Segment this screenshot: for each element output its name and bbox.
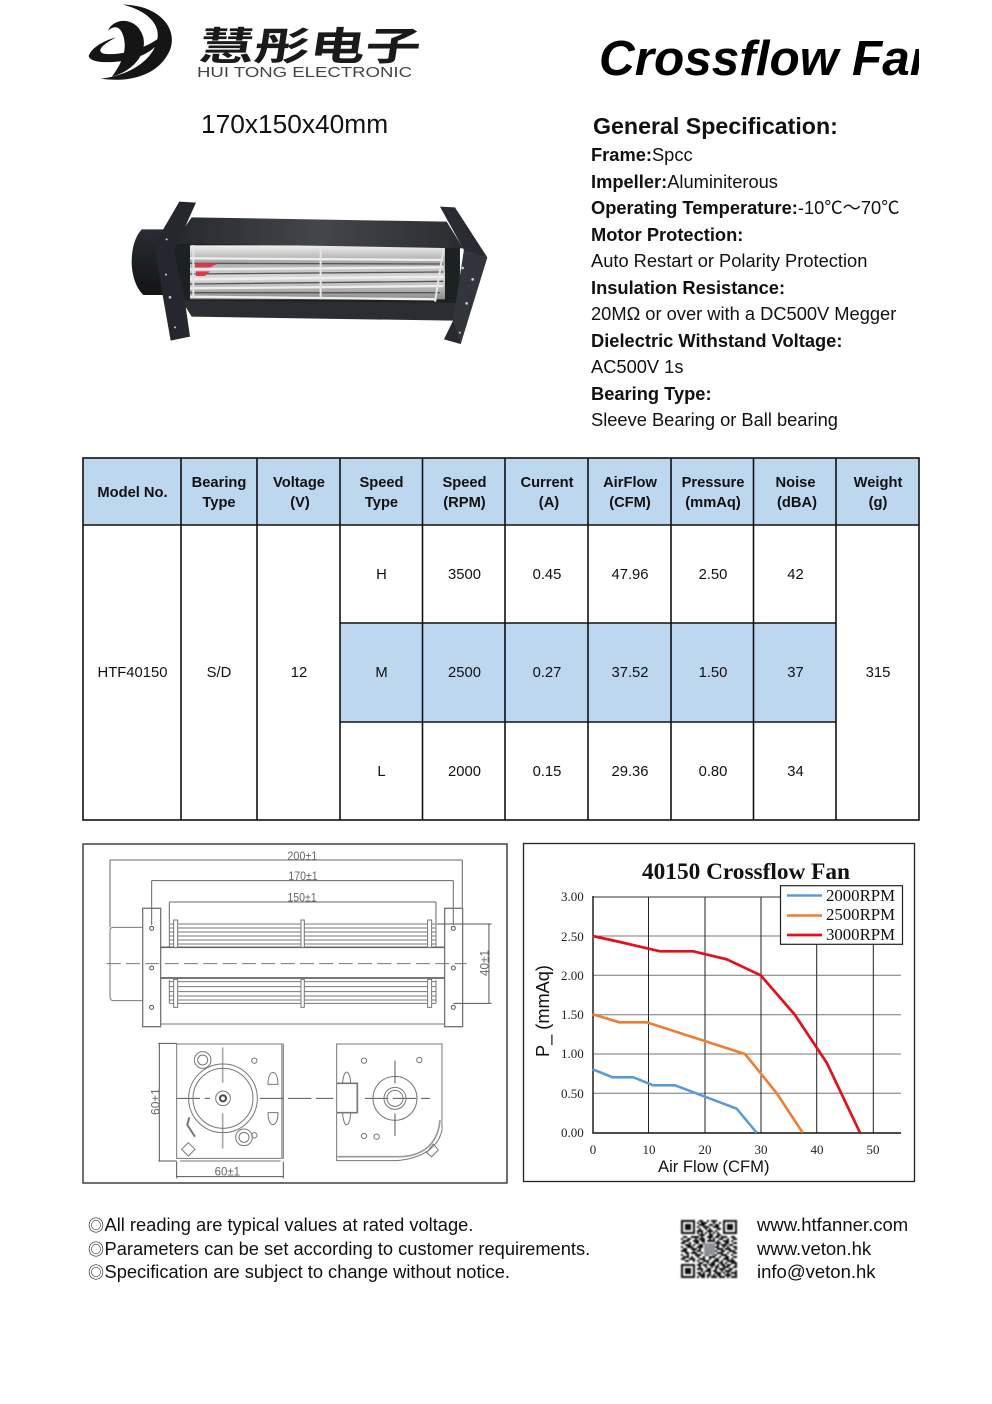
- table header labels: (RPM): [443, 495, 486, 511]
- curve: 3000 rpm: [593, 936, 860, 1133]
- footnotes: ◎: [88, 1217, 104, 1235]
- legend: 2500RPM: [826, 905, 895, 924]
- interior: [173, 243, 460, 305]
- table data cells: 0.15: [533, 764, 561, 780]
- x axis tick labels: 10: [642, 1142, 656, 1157]
- table data cells: [98, 567, 890, 780]
- fan photo: [132, 202, 487, 344]
- y axis tick labels: 0.00: [561, 1125, 584, 1140]
- table header labels: Noise: [776, 475, 816, 491]
- y axis tick labels: 3.00: [561, 889, 584, 904]
- table header labels: (V): [290, 495, 310, 511]
- panel: performance chart: [524, 844, 914, 1182]
- chart title: 40150 Crossflow Fan: [642, 859, 850, 885]
- legend: [780, 886, 902, 944]
- table data cells: 0.45: [533, 567, 561, 583]
- panel: general specification: [591, 113, 900, 430]
- table data cells: M: [375, 665, 388, 681]
- table header labels: [97, 475, 902, 511]
- y axis title: P_ (mmAq): [533, 965, 554, 1057]
- contact details: info@veton.hk: [757, 1261, 876, 1282]
- logo english name: HUI TONG ELECTRONIC: [197, 64, 412, 81]
- footnotes: Parameters can be set according to customer requirements.: [104, 1238, 590, 1259]
- table header labels: Model No.: [97, 485, 168, 501]
- specification list: Insulation Resistance:: [591, 277, 785, 298]
- specification list: [591, 144, 900, 430]
- specification list: 20MΩ or over with a DC500V Megger: [591, 303, 896, 324]
- table header labels: Weight: [854, 475, 902, 491]
- table header labels: Pressure: [682, 475, 744, 491]
- motor housing: [132, 229, 167, 295]
- x axis tick labels: 30: [754, 1142, 768, 1157]
- table data cells: 2.50: [699, 567, 727, 583]
- y axis tick labels: 0.50: [561, 1086, 584, 1101]
- specification list: AC500V 1s: [591, 356, 683, 377]
- chart frame: [524, 844, 914, 1182]
- bottom bar: [182, 301, 457, 321]
- y axis tick labels: 1.00: [561, 1046, 584, 1061]
- legend: 2000RPM: [826, 886, 895, 905]
- table data cells: 12: [291, 665, 307, 681]
- specification list: Frame:Spcc: [591, 144, 693, 165]
- specification heading: General Specification:: [593, 113, 838, 139]
- top bar: [173, 217, 463, 248]
- specification list: Motor Protection:: [591, 224, 743, 245]
- table data cells: 315: [866, 665, 890, 681]
- table data cells: 1.50: [699, 665, 727, 681]
- y axis tick labels: 1.50: [561, 1007, 584, 1022]
- chart grid: [593, 896, 901, 1133]
- specification list: Dielectric Withstand Voltage:: [591, 330, 842, 351]
- highlighted medium speed row: [340, 623, 836, 722]
- table header labels: Bearing: [192, 475, 246, 491]
- contact details: www.htfanner.com: [756, 1214, 908, 1235]
- footnotes: [88, 1214, 590, 1282]
- x axis tick labels: 50: [866, 1142, 880, 1157]
- icon: QR code: [681, 1221, 737, 1277]
- table header labels: (mmAq): [685, 495, 741, 511]
- contact details: www.veton.hk: [756, 1238, 872, 1259]
- drawing frame: [83, 844, 507, 1183]
- table data cells: 2000: [448, 764, 481, 780]
- logo: [89, 5, 426, 81]
- table data cells: 0.80: [699, 764, 727, 780]
- specification list: Sleeve Bearing or Ball bearing: [591, 409, 838, 430]
- x axis tick labels: 20: [698, 1142, 712, 1157]
- y axis tick labels: [561, 889, 584, 1140]
- table data cells: S/D: [207, 665, 231, 681]
- footnotes: ◎: [88, 1241, 104, 1259]
- x axis tick labels: 40: [810, 1142, 824, 1157]
- table header fill: [83, 458, 919, 525]
- dimension 60 horizontal: 60±1: [215, 1164, 240, 1178]
- y axis tick labels: 2.00: [561, 968, 584, 983]
- logo chinese name: 慧彤电子: [195, 15, 426, 71]
- table header labels: (dBA): [777, 495, 817, 511]
- x axis tick labels: 0: [590, 1142, 596, 1157]
- specification list: Auto Restart or Polarity Protection: [591, 250, 867, 271]
- table data cells: 2500: [448, 665, 481, 681]
- table header labels: Type: [365, 495, 398, 511]
- contact details: [756, 1214, 908, 1282]
- table header labels: Current: [520, 475, 574, 491]
- table grid: [83, 458, 919, 820]
- table header labels: Speed: [442, 475, 487, 491]
- table header labels: (A): [539, 495, 559, 511]
- footnotes: All reading are typical values at rated voltage.: [104, 1214, 473, 1235]
- specification list: Impeller:Aluminiterous: [591, 171, 778, 192]
- table data cells: 42: [787, 567, 804, 583]
- size heading: 170x150x40mm: [201, 109, 388, 139]
- dimension 170: 170±1: [288, 869, 318, 883]
- curve: 2000 rpm: [593, 1069, 757, 1133]
- curve: 2500 rpm: [593, 1014, 803, 1133]
- panel: mechanical drawing: [83, 844, 507, 1183]
- panel: data table: [83, 458, 919, 820]
- table data cells: L: [377, 764, 386, 780]
- footnotes: Specification are subject to change without notice.: [104, 1261, 510, 1282]
- table data cells: 3500: [448, 567, 481, 583]
- table data cells: 37: [787, 665, 804, 681]
- footnotes: ◎: [88, 1264, 104, 1282]
- dimension 60 vertical: 60±1: [148, 1088, 162, 1115]
- specification list: Operating Temperature:-10℃～70℃: [591, 197, 900, 218]
- table data cells: H: [376, 567, 387, 583]
- table header labels: Type: [202, 495, 236, 511]
- title: Crossflow Fan: [599, 31, 940, 86]
- icon: company swoosh mark: [89, 5, 172, 80]
- dimension 150: 150±1: [287, 890, 317, 904]
- table header labels: AirFlow: [603, 475, 657, 491]
- table header labels: Voltage: [273, 475, 325, 491]
- side view drawing: [107, 849, 492, 1027]
- table data cells: 0.27: [533, 665, 561, 681]
- table data cells: 29.36: [611, 764, 649, 780]
- table data cells: 34: [787, 764, 804, 780]
- x axis title: Air Flow (CFM): [658, 1157, 770, 1176]
- table header labels: (CFM): [609, 495, 651, 511]
- x axis tick labels: [590, 1142, 880, 1157]
- table data cells: 37.52: [611, 665, 649, 681]
- left bracket: [155, 202, 196, 341]
- table data cells: HTF40150: [98, 665, 167, 681]
- right bracket: [440, 207, 487, 344]
- specification list: Bearing Type:: [591, 383, 712, 404]
- table header labels: Speed: [359, 475, 404, 491]
- legend: 3000RPM: [826, 925, 895, 944]
- dimension 200: 200±1: [287, 849, 317, 863]
- impeller blades: [190, 245, 445, 302]
- y axis tick labels: 2.50: [561, 929, 584, 944]
- table data cells: 47.96: [611, 567, 649, 583]
- dimension 40: 40±1: [477, 950, 491, 976]
- end views drawing: [148, 1043, 442, 1178]
- table header labels: (g): [869, 495, 887, 511]
